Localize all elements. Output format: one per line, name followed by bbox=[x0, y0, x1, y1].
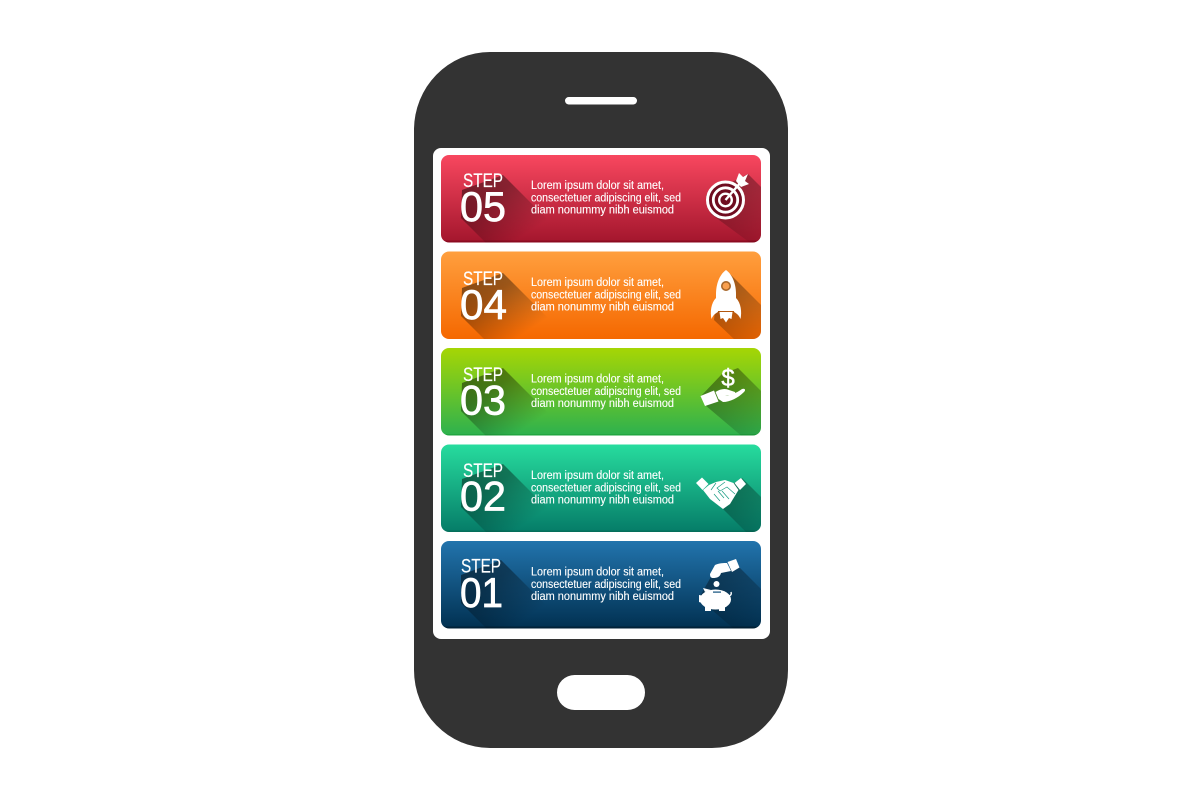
description text: diam nonummy nibh euismod bbox=[531, 300, 674, 314]
long shadow of step label bbox=[461, 273, 544, 339]
card background blue bbox=[441, 541, 761, 628]
description text: consectetuer adipiscing elit, sed bbox=[531, 480, 681, 494]
description text: diam nonummy nibh euismod bbox=[531, 493, 674, 507]
description text: consectetuer adipiscing elit, sed bbox=[531, 384, 681, 398]
panel: step 05 bbox=[441, 155, 761, 242]
long shadow of step label bbox=[461, 368, 543, 436]
step label: STEP bbox=[463, 171, 503, 192]
long shadow of step label bbox=[461, 464, 542, 532]
icon long shadow bbox=[723, 478, 761, 532]
icon long shadow bbox=[706, 174, 761, 242]
step number: 04 bbox=[460, 281, 507, 328]
description text: Lorem ipsum dolor sit amet, bbox=[531, 468, 664, 482]
speaker slot bbox=[565, 97, 637, 104]
panel: step 03 bbox=[441, 348, 761, 436]
description text: diam nonummy nibh euismod bbox=[531, 203, 674, 217]
step label: STEP bbox=[463, 365, 503, 386]
description text: diam nonummy nibh euismod bbox=[531, 396, 674, 410]
icon long shadow bbox=[714, 274, 761, 339]
description text: Lorem ipsum dolor sit amet, bbox=[531, 564, 664, 578]
card background orange bbox=[441, 252, 761, 339]
description text: Lorem ipsum dolor sit amet, bbox=[531, 178, 664, 192]
description text: consectetuer adipiscing elit, sed bbox=[531, 577, 681, 591]
long shadow of step label bbox=[461, 175, 543, 242]
icon: hand holding dollar: $ bbox=[721, 365, 735, 392]
description text bbox=[531, 372, 681, 410]
description text bbox=[531, 468, 681, 507]
icon long shadow bbox=[701, 368, 761, 436]
icon: rocket bbox=[711, 270, 741, 322]
step number: 01 bbox=[460, 569, 503, 616]
description text bbox=[531, 275, 681, 314]
description text: consectetuer adipiscing elit, sed bbox=[531, 287, 681, 301]
phone body bbox=[414, 52, 788, 748]
home button bbox=[557, 675, 645, 710]
panel: step 04 bbox=[441, 252, 761, 339]
description text: Lorem ipsum dolor sit amet, bbox=[531, 275, 664, 289]
icon: target with arrow bbox=[708, 173, 749, 218]
long shadow of step label bbox=[461, 560, 538, 626]
phone screen bbox=[433, 148, 770, 639]
description text: Lorem ipsum dolor sit amet, bbox=[531, 372, 664, 386]
step label: STEP bbox=[463, 269, 503, 290]
card background red bbox=[441, 155, 761, 242]
icon: handshake bbox=[696, 478, 746, 509]
panel: step 01 bbox=[441, 541, 761, 628]
step number: 05 bbox=[460, 183, 506, 230]
step label: STEP bbox=[463, 461, 503, 482]
icon: hand dropping coin into piggy bank bbox=[699, 559, 740, 611]
description text: diam nonummy nibh euismod bbox=[531, 589, 674, 603]
step label: STEP bbox=[461, 556, 501, 578]
icon long shadow bbox=[700, 568, 761, 626]
card background teal bbox=[441, 444, 761, 532]
description text bbox=[531, 178, 681, 217]
panel: step 02 bbox=[441, 444, 761, 532]
icon: hand holding dollar bbox=[700, 365, 745, 406]
card background green bbox=[441, 348, 761, 436]
step number: 02 bbox=[460, 472, 506, 520]
step number: 03 bbox=[460, 376, 506, 424]
description text: consectetuer adipiscing elit, sed bbox=[531, 190, 681, 204]
description text bbox=[531, 564, 681, 603]
